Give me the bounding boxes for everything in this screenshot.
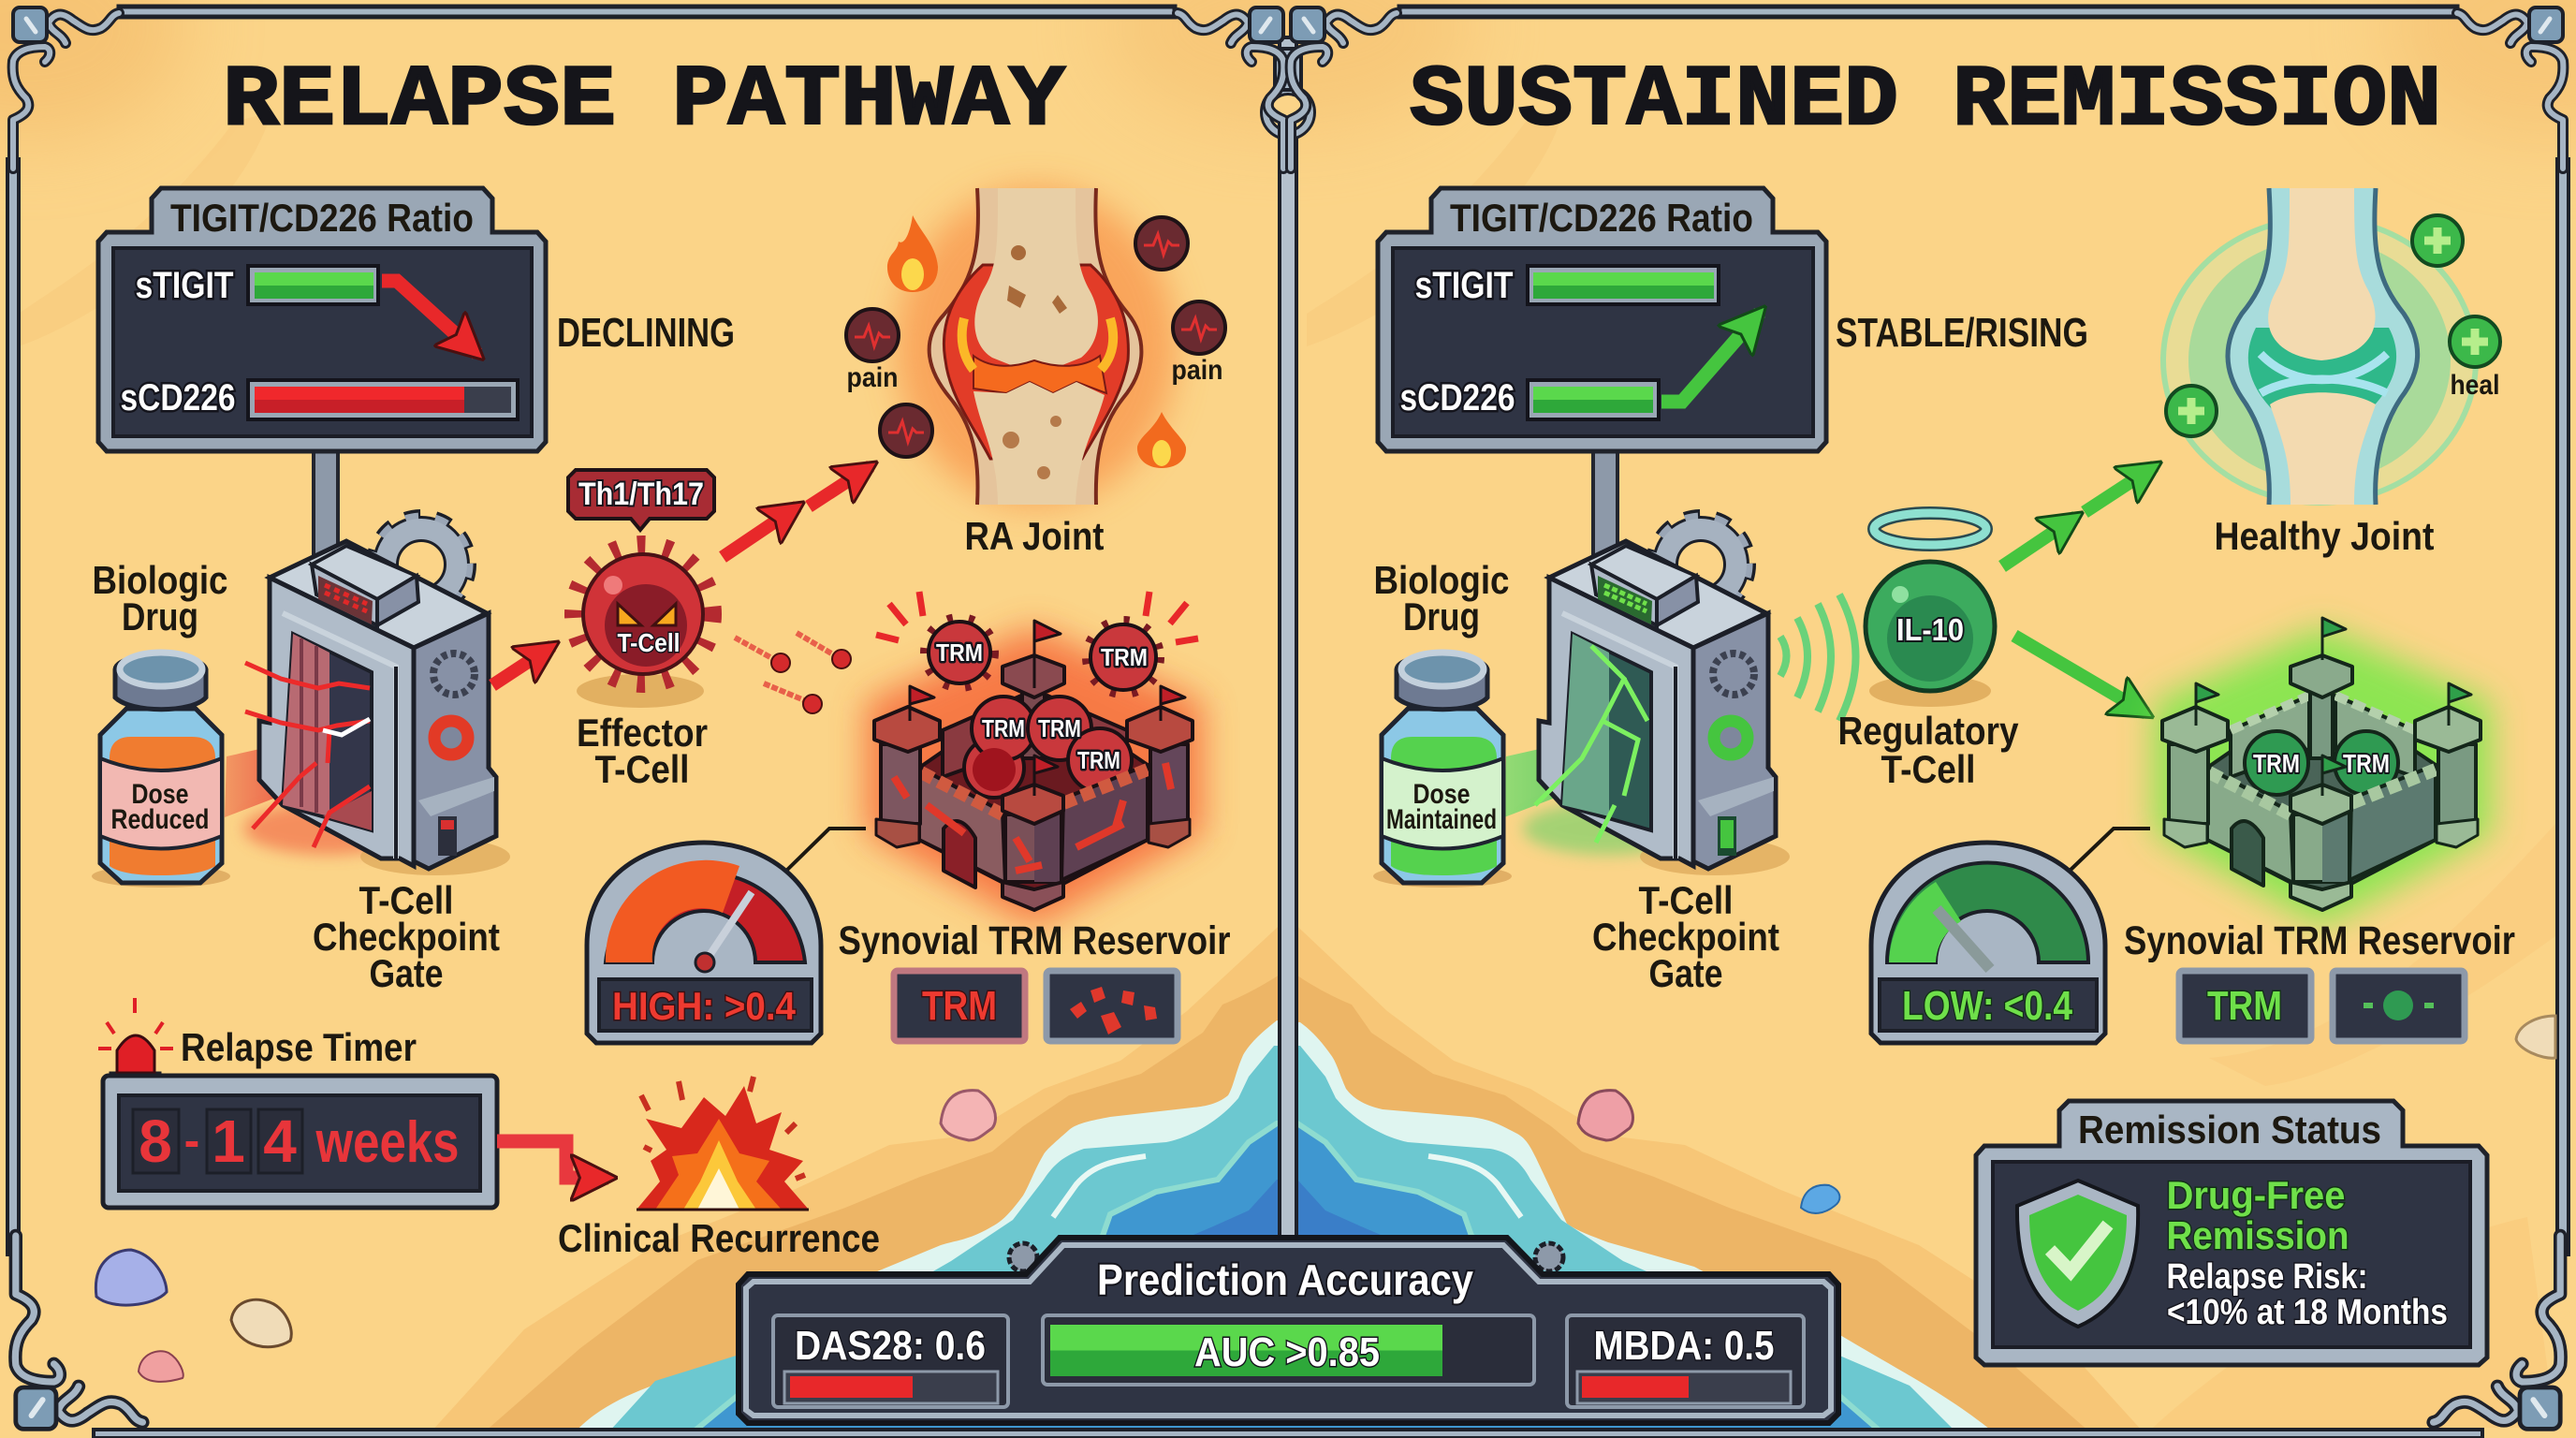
icon: pain bubble (1173, 301, 1225, 354)
TRM labels: TRM (1077, 746, 1120, 774)
icon: pain bubble (1135, 217, 1188, 270)
sTIGIT label: sTIGIT (1415, 265, 1513, 306)
label: relapse timer: Relapse Timer (181, 1025, 417, 1069)
icon: biologic drug vial, dose maintained (1373, 653, 1512, 888)
panel: relapse timer (103, 1076, 497, 1208)
panel tab text: TIGIT/CD226 Ratio (170, 196, 474, 240)
shell: pink (941, 1091, 996, 1140)
label: biologic drug (92, 558, 228, 638)
label: T-cell checkpoint gate (1592, 878, 1779, 995)
label: pain: pain (1172, 355, 1222, 386)
icon: siren (98, 998, 173, 1085)
panel: prediction accuracy (739, 1238, 1838, 1423)
arrow: regulatory to healthy joint, part 1 (2002, 517, 2076, 566)
callout: Th1/Th17: Th1/Th17 (578, 477, 704, 512)
icon: heal plus (2450, 316, 2500, 367)
panel: TIGIT/CD226 ratio relapse (98, 188, 546, 451)
sCD226 bar (248, 380, 518, 419)
label: regulatory T-cell (1838, 709, 2019, 791)
shell: pink right (1578, 1091, 1633, 1140)
icon: pain bubble (846, 309, 899, 361)
gauge readout: LOW: <0.4 (1902, 983, 2072, 1029)
sTIGIT bar (1528, 266, 1719, 304)
arrow: rising (1661, 313, 1760, 402)
icon: flame (1137, 412, 1186, 468)
cell text: T-Cell (618, 628, 680, 657)
shell: small pink (139, 1351, 183, 1382)
timer value (139, 1108, 459, 1175)
vial text: Dose (131, 779, 189, 810)
arrows: migrating cells (735, 633, 851, 713)
timer value: 8 (139, 1108, 172, 1175)
label: biologic drug: Drug (122, 594, 198, 638)
timer value: 1 (212, 1108, 245, 1175)
TRM labels: TRM (936, 638, 983, 667)
icon: shield check (2017, 1181, 2138, 1327)
timer value: weeks (315, 1110, 459, 1175)
badge: TRM low: TRM (2207, 983, 2282, 1029)
metric: MBDA (1567, 1315, 1804, 1407)
label: biologic drug: Drug (1403, 594, 1480, 638)
panel tab text: TIGIT/CD226 Ratio (1450, 196, 1753, 240)
icon: biologic drug vial, dose reduced (92, 653, 230, 888)
leader: gauge to castle (2068, 829, 2150, 873)
label: T-cell checkpoint gate: Checkpoint (1592, 915, 1779, 959)
label: regulatory T-cell: T-Cell (1881, 747, 1975, 791)
icon: effector T-cell (577, 549, 709, 708)
sCD226 bar (1528, 380, 1659, 419)
leader: gauge to castle (784, 829, 866, 873)
callout: Th1/Th17 (568, 470, 714, 530)
arrow: cell to joint, part 1 (723, 506, 798, 557)
arrow: regulatory to healthy joint, part 2 (2085, 466, 2155, 512)
metric: DAS28 (773, 1315, 1008, 1407)
pole left (314, 448, 338, 560)
icon: explosion (637, 1077, 809, 1210)
label: effector T-cell: T-Cell (595, 747, 689, 791)
label: T-cell checkpoint gate: Gate (369, 951, 444, 995)
label: T-cell checkpoint gate: T-Cell (359, 878, 453, 922)
metric: AUC (1043, 1315, 1534, 1385)
arrow: declining (382, 281, 477, 354)
arrow: cell to joint, part 2 (809, 466, 871, 506)
label: biologic drug: Biologic (92, 558, 228, 602)
label: pain: pain (846, 362, 899, 393)
arrow: regulatory to castle (2014, 636, 2146, 713)
vial text: Reduced (110, 804, 210, 835)
badge: TRM low (2179, 971, 2311, 1041)
panel: remission status (1976, 1101, 2487, 1365)
beam: drug to gate (225, 744, 281, 817)
label: effector T-cell (577, 711, 708, 791)
arrow: timer to recurrence (497, 1141, 608, 1178)
icon: heal plus (2166, 386, 2217, 436)
status text: Relapse Risk: (2166, 1257, 2368, 1297)
label: biologic drug: Biologic (1374, 558, 1509, 602)
sCD226 label: sCD226 (1400, 377, 1515, 418)
arrow: gate to effector cell (492, 646, 552, 685)
badge: TRM cells scattered (1046, 971, 1178, 1041)
timer value: - (184, 1114, 199, 1167)
gauge: high (587, 843, 821, 1043)
icon: TRM castle, overrun (866, 592, 1203, 927)
shell: purple (95, 1250, 167, 1305)
icon: T-cell checkpoint gate, blocked (243, 520, 510, 875)
gauge: low (1871, 843, 2105, 1043)
panel: TIGIT/CD226 ratio remission (1378, 188, 1826, 451)
TRM labels: TRM (2343, 749, 2390, 778)
title: relapse pathway: RELAPSE PATHWAY (223, 51, 1066, 150)
vial text: Dose (1413, 779, 1470, 810)
label: biologic drug (1374, 558, 1509, 638)
TRM labels: TRM (2253, 749, 2300, 778)
label: declining: DECLINING (557, 310, 735, 356)
shell: cream right (2516, 1016, 2555, 1058)
vial text (110, 779, 210, 835)
label: effector T-cell: Effector (577, 711, 708, 755)
shell: blue (1801, 1185, 1839, 1213)
metric: MBDA: MBDA: 0.5 (1593, 1323, 1775, 1369)
status text: Remission (2166, 1213, 2349, 1257)
pole right (1593, 448, 1617, 560)
label: T-cell checkpoint gate: T-Cell (1638, 878, 1734, 922)
TRM labels: TRM (1101, 643, 1148, 671)
gauge readout: HIGH: >0.4 (612, 984, 797, 1028)
sTIGIT label: sTIGIT (135, 265, 234, 306)
icon: pain bubble (880, 404, 932, 457)
label: regulatory T-cell: Regulatory (1838, 709, 2019, 753)
title: sustained remission: SUSTAINED REMISSION (1410, 51, 2441, 150)
label: T-cell checkpoint gate: Checkpoint (313, 915, 500, 959)
metric: DAS28: DAS28: 0.6 (795, 1323, 986, 1369)
badge: TRM contained (2333, 971, 2465, 1041)
TRM labels (2253, 749, 2390, 778)
lightning (245, 663, 370, 847)
icon: heal plus (2412, 215, 2463, 266)
icon: regulatory T-cell with halo (1866, 513, 1995, 707)
icon: TRM castle, contained (2154, 618, 2491, 927)
label: synovial TRM reservoir: Synovial TRM Reservoir (2124, 918, 2515, 963)
water (575, 1020, 1994, 1432)
beam: drug to gate (1504, 744, 1560, 817)
status text (2166, 1173, 2448, 1332)
heading: Prediction Accuracy (1097, 1255, 1473, 1304)
TRM labels: TRM (1038, 714, 1081, 742)
timer value: 4 (263, 1108, 297, 1175)
label: stable/rising: STABLE/RISING (1836, 310, 2088, 356)
label: RA joint: RA Joint (964, 514, 1105, 558)
icon: flame (887, 215, 938, 292)
TRM labels (936, 638, 1148, 774)
status text: Drug-Free (2166, 1173, 2346, 1217)
icon: RA joint (896, 187, 1177, 506)
label: clinical recurrence: Clinical Recurrence (558, 1216, 880, 1260)
label: healthy joint: Healthy Joint (2215, 514, 2435, 558)
icon: signal waves (1780, 594, 1855, 721)
label: heal: heal (2451, 370, 2499, 401)
vial text: Maintained (1386, 804, 1497, 835)
cell text: IL-10 (1896, 612, 1964, 647)
metric: AUC: AUC >0.85 (1194, 1329, 1380, 1375)
label: synovial TRM reservoir: Synovial TRM Reservoir (839, 918, 1231, 963)
badge: TRM high: TRM (922, 983, 997, 1029)
panel heading: Remission Status (2078, 1108, 2381, 1152)
sCD226 label: sCD226 (120, 377, 236, 418)
icon: healthy joint (2163, 188, 2476, 505)
shell: cream (231, 1299, 291, 1347)
lightning (1535, 646, 1647, 843)
icon: T-cell checkpoint gate, open (1523, 520, 1790, 875)
TRM labels: TRM (982, 714, 1025, 742)
badge: TRM high (894, 971, 1025, 1041)
label: T-cell checkpoint gate (313, 878, 500, 995)
status text: <10% at 18 Months (2167, 1293, 2448, 1332)
vial text (1386, 779, 1497, 835)
sTIGIT bar (248, 266, 378, 304)
label: T-cell checkpoint gate: Gate (1649, 951, 1722, 995)
